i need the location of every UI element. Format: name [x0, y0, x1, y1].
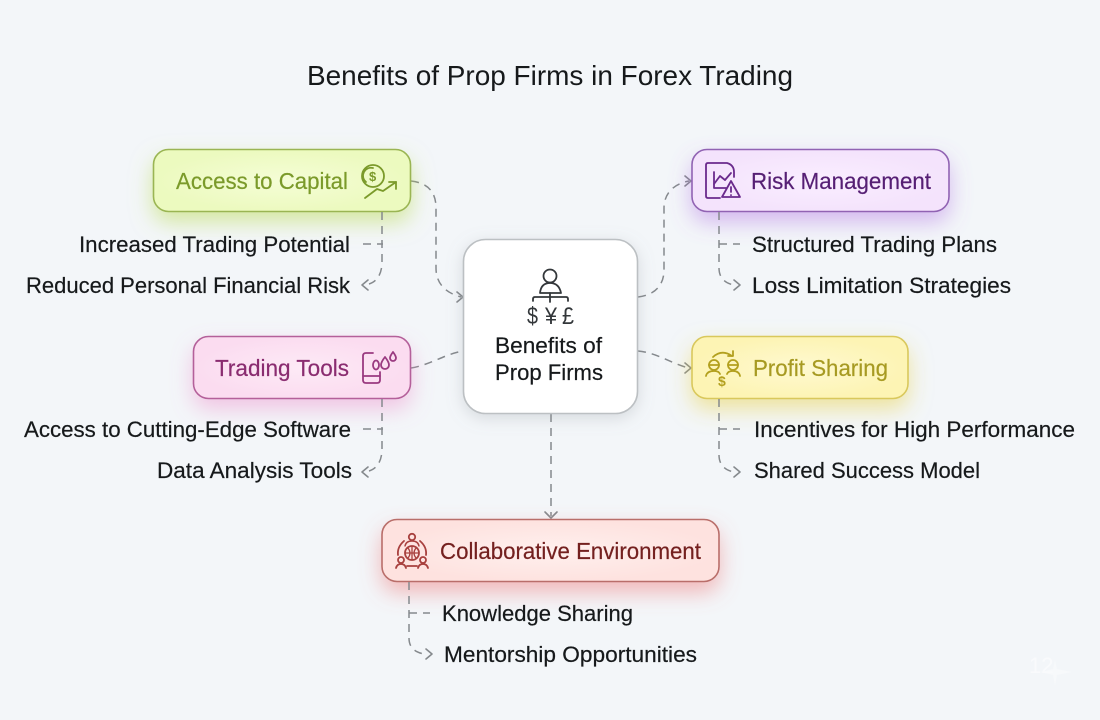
item: Loss Limitation Strategies: [752, 273, 1011, 298]
box: [692, 150, 949, 212]
item: Knowledge Sharing: [442, 601, 633, 626]
icon: person with currencies: ¥: [544, 303, 558, 330]
icon: person with currencies: [527, 270, 574, 330]
arrow: capital to centre: [411, 181, 463, 302]
box: [194, 336, 410, 398]
panel: central node: [464, 240, 638, 414]
panel: collaborative environment: [382, 520, 719, 667]
item: Mentorship Opportunities: [444, 642, 697, 667]
icon: team around a globe: [396, 534, 428, 568]
heading: Benefits of: [495, 333, 603, 358]
connector tree: [362, 399, 383, 477]
box: [692, 336, 908, 398]
watermark: 12: [1029, 653, 1053, 678]
connector tree: [719, 212, 740, 290]
heading: Trading Tools: [215, 355, 349, 381]
panel: access to capital: [26, 150, 410, 298]
connectors from centre to branches: [411, 176, 691, 518]
item: Shared Success Model: [754, 458, 980, 483]
item: Incentives for High Performance: [754, 417, 1075, 442]
title: Benefits of Prop Firms in Forex Trading: [307, 60, 793, 91]
watermark: [1029, 653, 1072, 686]
icon: chart document with warning: [706, 163, 740, 198]
panel: profit sharing: [692, 336, 1075, 483]
connector tree: [409, 582, 432, 659]
icon: phone with pins: [363, 352, 396, 383]
item: Data Analysis Tools: [157, 458, 352, 483]
connector tree: [362, 212, 383, 290]
box: [464, 240, 638, 414]
connector tree: [719, 399, 740, 477]
icon: coin and growth arrow: $: [369, 169, 377, 184]
panel: trading tools: [24, 336, 410, 483]
arrow: tools to centre: [411, 351, 463, 368]
icon: coin and growth arrow: [362, 165, 396, 198]
heading line two: Prop Firms: [495, 360, 603, 385]
icon: two people sharing money: [706, 351, 740, 389]
arrow: centre to risk management: [638, 176, 691, 297]
box: [382, 520, 719, 582]
item: Increased Trading Potential: [79, 232, 350, 257]
heading: Profit Sharing: [753, 355, 888, 381]
item: Access to Cutting-Edge Software: [24, 417, 351, 442]
item: Reduced Personal Financial Risk: [26, 273, 351, 298]
icon: person with currencies: £: [562, 303, 574, 330]
arrow: centre to collaborative environment: [545, 414, 557, 518]
box: [154, 150, 410, 212]
icon: two people sharing money: $: [718, 373, 726, 389]
heading: Collaborative Environment: [440, 538, 702, 564]
icon: person with currencies: $: [527, 303, 538, 330]
panel: risk management: [692, 150, 1011, 298]
arrow: centre to profit sharing: [638, 351, 691, 373]
item: Structured Trading Plans: [752, 232, 997, 257]
heading: Risk Management: [751, 168, 932, 194]
heading: Access to Capital: [176, 168, 348, 194]
